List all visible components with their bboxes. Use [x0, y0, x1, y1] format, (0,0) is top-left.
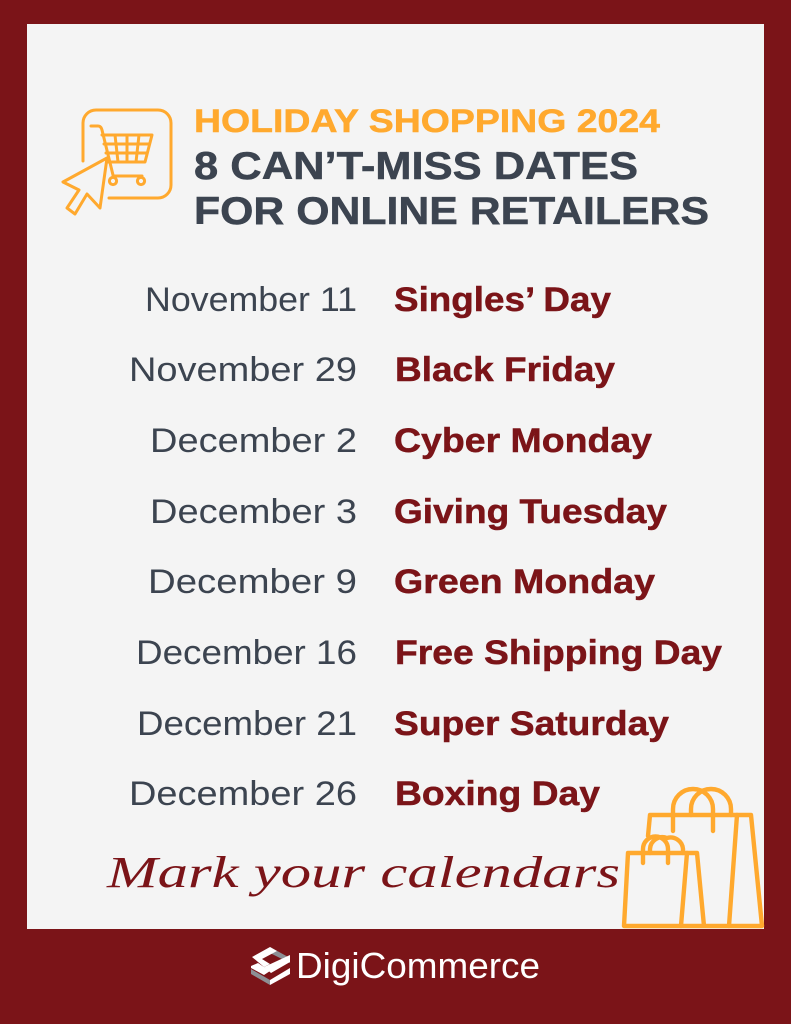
- event: Green Monday: Green Monday: [394, 563, 655, 601]
- event: Black Friday: Black Friday: [395, 351, 615, 389]
- script tagline: Mark your calendars: [106, 848, 620, 897]
- event names column: [394, 281, 722, 813]
- date: December 21: December 21: [137, 705, 357, 743]
- date: December 16: December 16: [136, 634, 357, 672]
- event: Singles' Day: Singles’ Day: [394, 281, 611, 319]
- icon: shopping bags: [624, 789, 762, 926]
- heading: [194, 103, 709, 233]
- date: December 26: December 26: [129, 775, 357, 813]
- dates column: [129, 281, 357, 813]
- date: November 11: November 11: [145, 281, 357, 319]
- event: Super Saturday: Super Saturday: [394, 705, 669, 743]
- logo wordmark: DigiCommerce: [296, 945, 540, 986]
- date: November 29: November 29: [129, 351, 357, 389]
- event: Boxing Day: Boxing Day: [395, 775, 600, 813]
- date: December 3: December 3: [150, 493, 357, 531]
- heading: line three: FOR ONLINE RETAILERS: [194, 190, 709, 233]
- date: December 9: December 9: [148, 563, 357, 601]
- event: Cyber Monday: Cyber Monday: [394, 422, 652, 460]
- logo: DigiCommerce: [251, 945, 540, 986]
- event: Giving Tuesday: Giving Tuesday: [394, 493, 667, 531]
- heading: line two: 8 CAN’T-MISS DATES: [194, 145, 638, 188]
- date: December 2: December 2: [150, 422, 357, 460]
- heading: year line: HOLIDAY SHOPPING 2024: [194, 103, 660, 139]
- icon: cart and cursor: [63, 110, 171, 214]
- event: Free Shipping Day: Free Shipping Day: [395, 634, 722, 672]
- logo mark: [251, 947, 290, 985]
